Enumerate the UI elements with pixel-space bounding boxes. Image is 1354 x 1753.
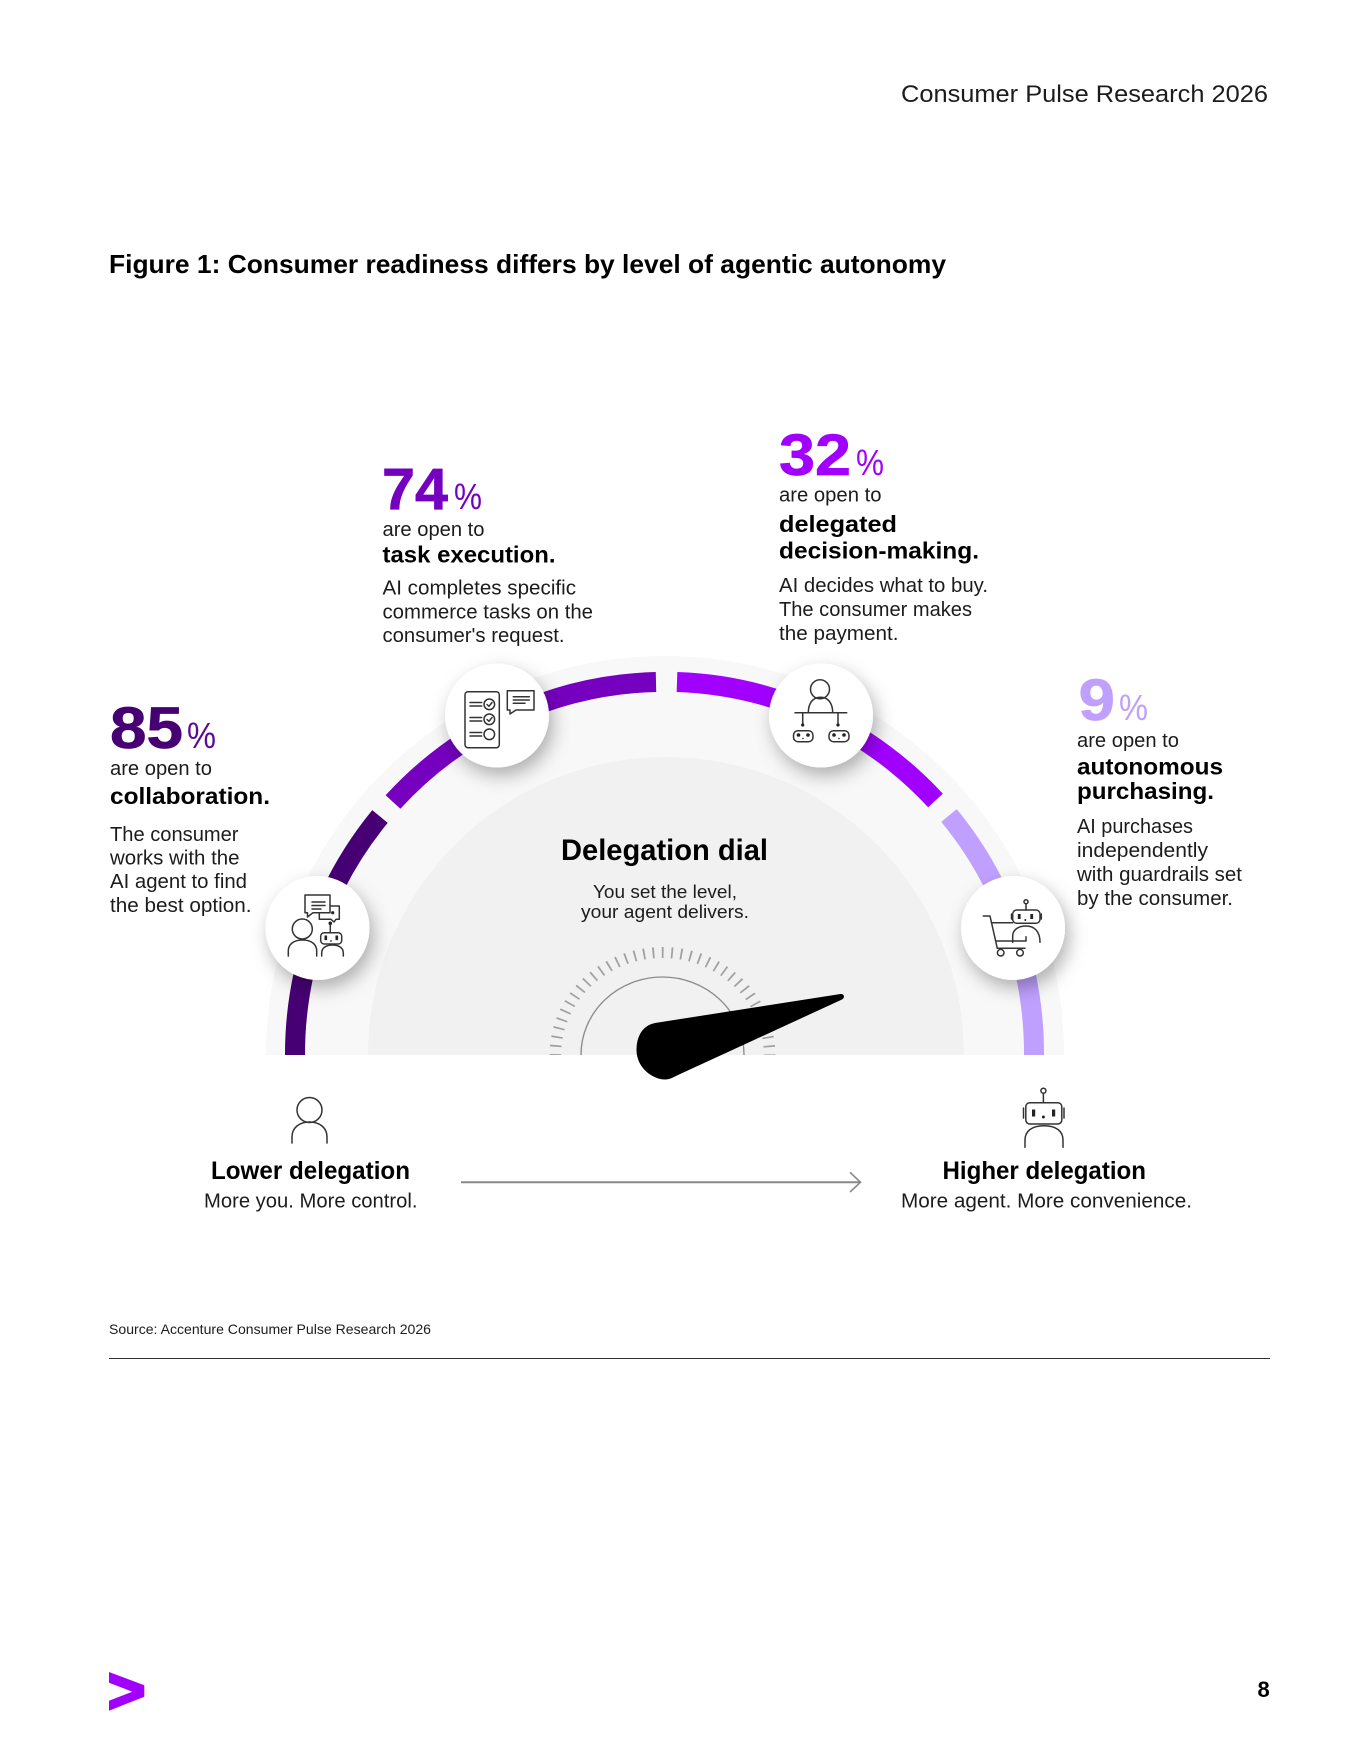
value 85%	[110, 696, 216, 761]
value 32%: %	[856, 442, 884, 483]
page number: 8	[1258, 1677, 1270, 1702]
description: by the consumer.	[1077, 888, 1233, 910]
dial subheading: your agent delivers.	[581, 902, 749, 922]
description: independently	[1077, 840, 1208, 862]
description: works with the	[109, 848, 239, 870]
icon: person directing two robots	[769, 664, 873, 768]
dial subheading	[581, 882, 749, 922]
scale: higher delegation	[901, 1088, 1192, 1212]
page canvas	[109, 84, 1270, 1711]
stat: 9% autonomous purchasing: purchasing.	[1077, 778, 1214, 804]
stat: 74% task execution: task execution.	[382, 542, 556, 568]
description: AI completes specific	[382, 578, 576, 600]
stat: 9% autonomous purchasing	[1076, 668, 1242, 910]
value 9%	[1078, 668, 1148, 733]
value 32%: 32	[779, 423, 851, 488]
delegation dial	[285, 672, 1044, 1080]
description: AI purchases	[1077, 816, 1193, 838]
gauge ticks	[550, 947, 776, 1055]
description: consumer's request.	[382, 625, 564, 647]
description: The consumer makes	[779, 599, 972, 621]
description	[1076, 816, 1242, 910]
stat: 32% delegated decision-making: are open to	[779, 484, 882, 506]
scale: higher delegation: More agent. More convenience.	[901, 1190, 1192, 1212]
dial background	[368, 757, 964, 1055]
value 74%: %	[454, 476, 482, 517]
stat: 32% delegated decision-making: delegated	[779, 511, 897, 537]
gauge needle	[636, 994, 844, 1080]
description: the best option.	[110, 895, 252, 917]
icon: person and robot collaborating	[266, 876, 370, 980]
stat: 32% delegated decision-making	[779, 423, 988, 645]
stat: 85% collaboration: collaboration.	[110, 783, 270, 809]
stat: 85% collaboration	[109, 696, 270, 917]
icon: robot with shopping cart	[961, 876, 1065, 980]
value 85%: 85	[110, 696, 183, 761]
description	[382, 578, 593, 647]
description: commerce tasks on the	[382, 602, 593, 624]
page header: Consumer Pulse Research 2026	[901, 81, 1268, 108]
icon: task checklist phone	[445, 664, 549, 768]
dial heading: Delegation dial	[561, 834, 768, 867]
description: AI decides what to buy.	[779, 575, 988, 597]
icon: robot	[1024, 1088, 1064, 1147]
dial subheading: You set the level,	[593, 882, 737, 902]
description: the payment.	[779, 623, 898, 645]
scale: lower delegation	[204, 1098, 418, 1212]
stat: 74% task execution: are open to	[382, 519, 484, 541]
description: AI agent to find	[110, 871, 247, 893]
figure title: Figure 1: Consumer readiness differs by level of agentic autonomy	[109, 249, 947, 279]
description	[109, 824, 252, 917]
stat: 9% autonomous purchasing: are open to	[1077, 730, 1179, 752]
description: with guardrails set	[1076, 864, 1242, 886]
stat: 85% collaboration: are open to	[110, 758, 212, 780]
arrow: lower to higher delegation	[461, 1172, 860, 1192]
value 32%	[779, 423, 884, 488]
scale: lower delegation: Lower delegation	[211, 1157, 410, 1185]
stat: 74% task execution	[382, 457, 593, 647]
value 74%: 74	[382, 457, 448, 522]
icon: person	[292, 1098, 327, 1143]
dial segments	[295, 682, 1034, 1060]
source note: Source: Accenture Consumer Pulse Research 2026	[109, 1321, 431, 1337]
value 9%: %	[1119, 687, 1148, 728]
description	[779, 575, 988, 645]
stat: 9% autonomous purchasing: autonomous	[1077, 754, 1223, 780]
value 9%: 9	[1078, 668, 1115, 733]
accenture logo	[109, 1672, 144, 1711]
scale: higher delegation: Higher delegation	[942, 1157, 1146, 1185]
stat: 32% delegated decision-making: decision-making.	[779, 538, 979, 564]
value 74%	[382, 457, 482, 522]
value 85%: %	[187, 715, 216, 756]
scale: lower delegation: More you. More control.	[204, 1190, 418, 1212]
description: The consumer	[110, 824, 239, 846]
